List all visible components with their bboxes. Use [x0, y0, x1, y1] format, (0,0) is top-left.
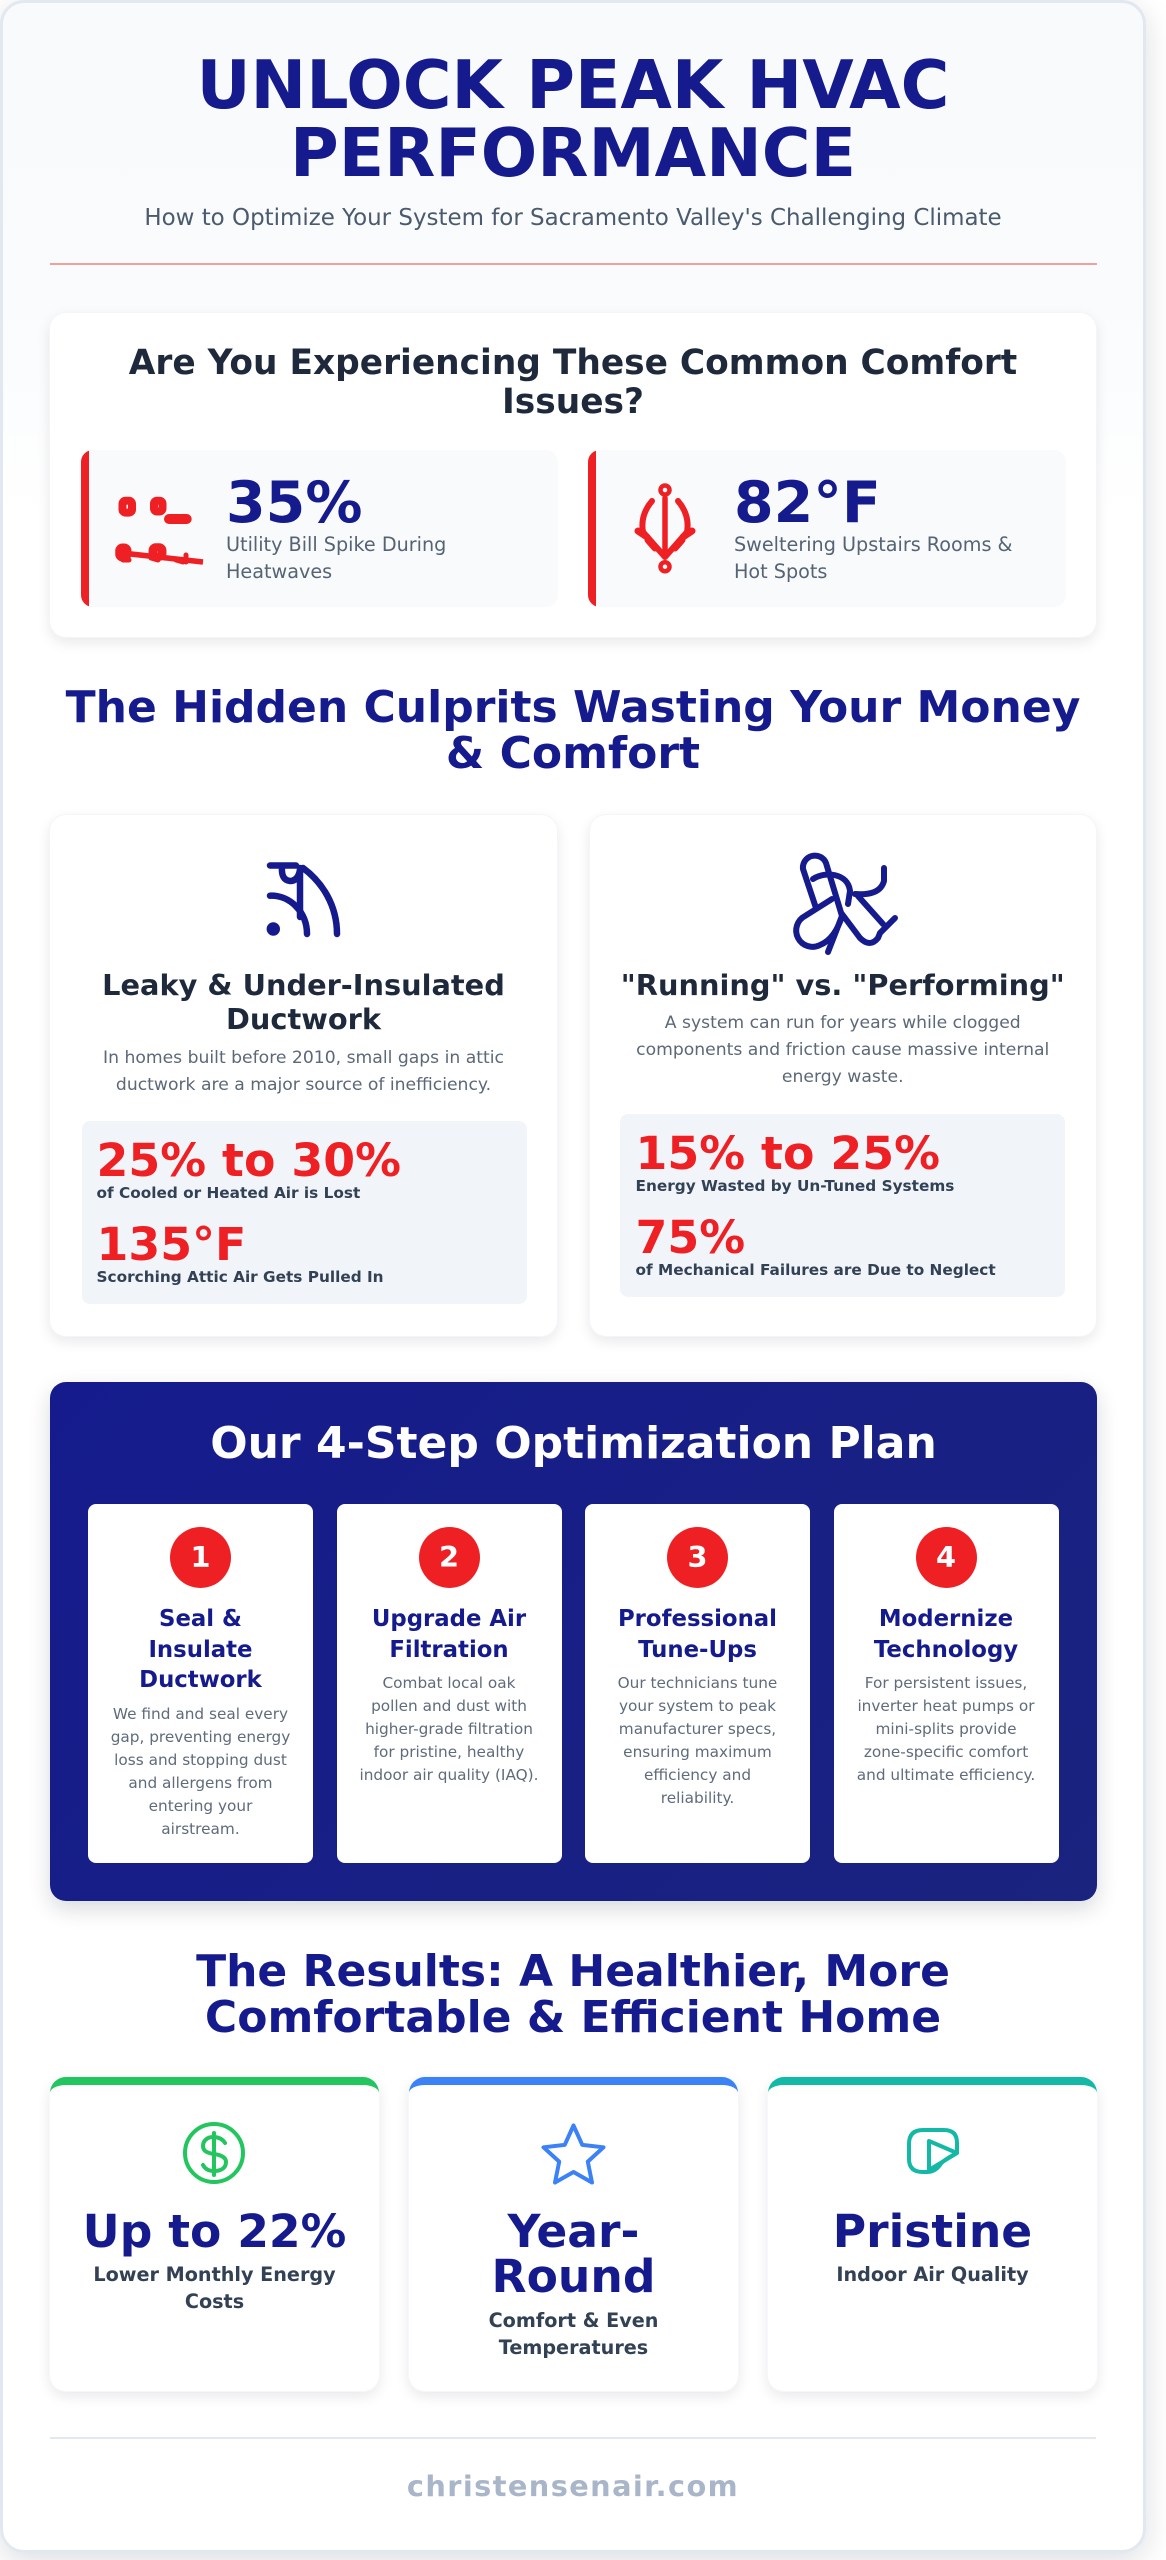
stat label: Scorching Attic Air Gets Pulled In [96, 1268, 384, 1286]
step 3 [585, 1504, 810, 1863]
step number: 4 [936, 1540, 956, 1574]
step description: and allergens from [128, 1774, 273, 1792]
card title: Leaky & Under-Insulated [102, 968, 505, 1002]
step description: your system to peak [619, 1697, 776, 1715]
step description: entering your [149, 1797, 252, 1815]
step title [372, 1606, 526, 1663]
step 4 [834, 1504, 1058, 1863]
step description: for pristine, healthy [374, 1743, 524, 1761]
stat label [734, 533, 1013, 583]
step description: higher-grade filtration [365, 1720, 533, 1738]
step title: Insulate [148, 1637, 253, 1663]
result label: Comfort & Even [489, 2309, 658, 2332]
plan heading: Our 4-Step Optimization Plan [210, 1418, 937, 1469]
card title: Ductwork [226, 1002, 381, 1036]
step number: 2 [439, 1540, 459, 1574]
panel: running vs performing [590, 815, 1096, 1336]
heading: the results [196, 1946, 950, 2042]
result value: Up to 22% [83, 2204, 346, 2258]
result card: energy costs [50, 2077, 379, 2391]
icon: broken sliders [115, 496, 204, 565]
icon: star [541, 2123, 606, 2185]
step description: indoor air quality (IAQ). [359, 1766, 539, 1784]
step number: 1 [190, 1540, 211, 1574]
step title: Seal & [159, 1606, 242, 1632]
step title: Modernize [879, 1606, 1013, 1632]
stat label: Utility Bill Spike During [226, 533, 446, 556]
stats box [82, 1121, 527, 1304]
heading: the results: Comfortable & Efficient Home [205, 1992, 941, 2042]
step title [874, 1606, 1018, 1663]
footer website: christensenair.com [407, 2469, 739, 2503]
step title: Tune-Ups [638, 1637, 757, 1663]
stat number: 82°F [734, 470, 881, 536]
icon: trident [634, 483, 696, 574]
title: PERFORMANCE [290, 114, 856, 192]
card title: "Running" vs. "Performing" [621, 968, 1065, 1002]
step number [170, 1527, 231, 1588]
step title: Technology [874, 1637, 1018, 1663]
subtitle: How to Optimize Your System for Sacramento Valley's Challenging Climate [144, 205, 1002, 231]
step description: Our technicians tune [618, 1674, 777, 1692]
step description: manufacturer specs, [619, 1720, 776, 1738]
step description: efficiency and [644, 1766, 751, 1784]
stats box [620, 1114, 1065, 1297]
step description: and ultimate efficiency. [857, 1766, 1035, 1784]
step description: pollen and dust with [371, 1697, 527, 1715]
step 1 [88, 1504, 313, 1863]
panel: leaky ductwork [50, 815, 557, 1336]
step description: inverter heat pumps or [857, 1697, 1035, 1715]
result label: Indoor Air Quality [836, 2263, 1029, 2286]
card description [103, 1048, 504, 1095]
result value [492, 2204, 656, 2302]
panel heading: Issues? [502, 382, 644, 422]
stat label: Energy Wasted by Un-Tuned Systems [636, 1177, 954, 1195]
step description: airstream. [161, 1820, 240, 1838]
card description: ductwork are a major source of inefficiency. [116, 1075, 491, 1095]
stat label: Heatwaves [226, 560, 332, 583]
stat card: utility bill [81, 450, 558, 607]
step number: 3 [687, 1540, 708, 1574]
result label: Temperatures [499, 2336, 648, 2359]
heading: hidden culprits [66, 682, 1080, 778]
step title: Upgrade Air [372, 1606, 526, 1632]
panel heading [129, 342, 1017, 422]
result value: Round [492, 2250, 656, 2302]
card description [636, 1013, 1049, 1087]
step 2 [336, 1504, 562, 1863]
stat label: of Mechanical Failures are Due to Neglect [636, 1261, 996, 1279]
result label: Lower Monthly Energy [93, 2263, 336, 2286]
stat: mechanical failures: 75% [636, 1210, 745, 1264]
stat label: of Cooled or Heated Air is Lost [96, 1184, 360, 1202]
result card: air quality [768, 2077, 1097, 2391]
panel: common comfort issues [50, 313, 1096, 637]
stat number: 35% [226, 470, 362, 536]
title [197, 46, 949, 192]
step description: For persistent issues, [865, 1674, 1027, 1692]
step description: We find and seal every [113, 1705, 288, 1723]
step description: Combat local oak [382, 1674, 515, 1692]
step description: reliability. [661, 1789, 734, 1807]
stat: energy wasted: 15% to 25% [636, 1126, 940, 1180]
step title: Professional [618, 1606, 777, 1632]
step description [359, 1674, 539, 1784]
step description: loss and stopping dust [114, 1751, 287, 1769]
step title: Ductwork [139, 1667, 262, 1693]
step number [916, 1527, 976, 1588]
stat label [226, 533, 446, 583]
icon: tools [793, 852, 898, 955]
result label: Costs [185, 2290, 244, 2313]
step description: ensuring maximum [623, 1743, 772, 1761]
step description [618, 1674, 777, 1807]
stat: attic temperature: 135°F [96, 1217, 246, 1271]
card description: energy waste. [782, 1067, 904, 1087]
stat: air lost: 25% to 30% [96, 1133, 401, 1187]
heading: the results: The Results: A Healthier, More [196, 1946, 950, 1996]
panel heading: Are You Experiencing These Common Comfort [129, 342, 1017, 382]
panel: 4-step optimization plan [50, 1382, 1097, 1901]
result label [93, 2263, 336, 2313]
step number [667, 1527, 728, 1588]
card description: In homes built before 2010, small gaps in attic [103, 1048, 504, 1068]
title: UNLOCK PEAK HVAC [197, 46, 949, 124]
step number [418, 1527, 480, 1588]
stat label: Sweltering Upstairs Rooms & [734, 533, 1013, 556]
heading: hidden culprits: & Comfort [446, 728, 700, 778]
step description: gap, preventing energy [111, 1728, 290, 1746]
stat card: upstairs temperature [588, 450, 1066, 607]
icon: dollar [183, 2122, 245, 2184]
step description [857, 1674, 1035, 1784]
step description: zone-specific comfort [864, 1743, 1028, 1761]
card title [102, 968, 505, 1036]
icon: duct [266, 862, 340, 938]
heading: hidden culprits: The Hidden Culprits Wasting Your Money [66, 682, 1080, 732]
step title [618, 1606, 777, 1663]
step description: mini-splits provide [875, 1720, 1017, 1738]
step title: Filtration [389, 1637, 509, 1663]
card description: components and friction cause massive internal [636, 1040, 1049, 1060]
step description [111, 1705, 290, 1838]
result card: comfort [409, 2077, 738, 2391]
result value: Pristine [833, 2204, 1032, 2258]
step title [139, 1606, 262, 1693]
stat label: Hot Spots [734, 560, 827, 583]
result label [489, 2309, 658, 2359]
result value: Year- [508, 2204, 639, 2258]
card description: A system can run for years while clogged [665, 1013, 1021, 1033]
icon: air quality [907, 2128, 960, 2174]
